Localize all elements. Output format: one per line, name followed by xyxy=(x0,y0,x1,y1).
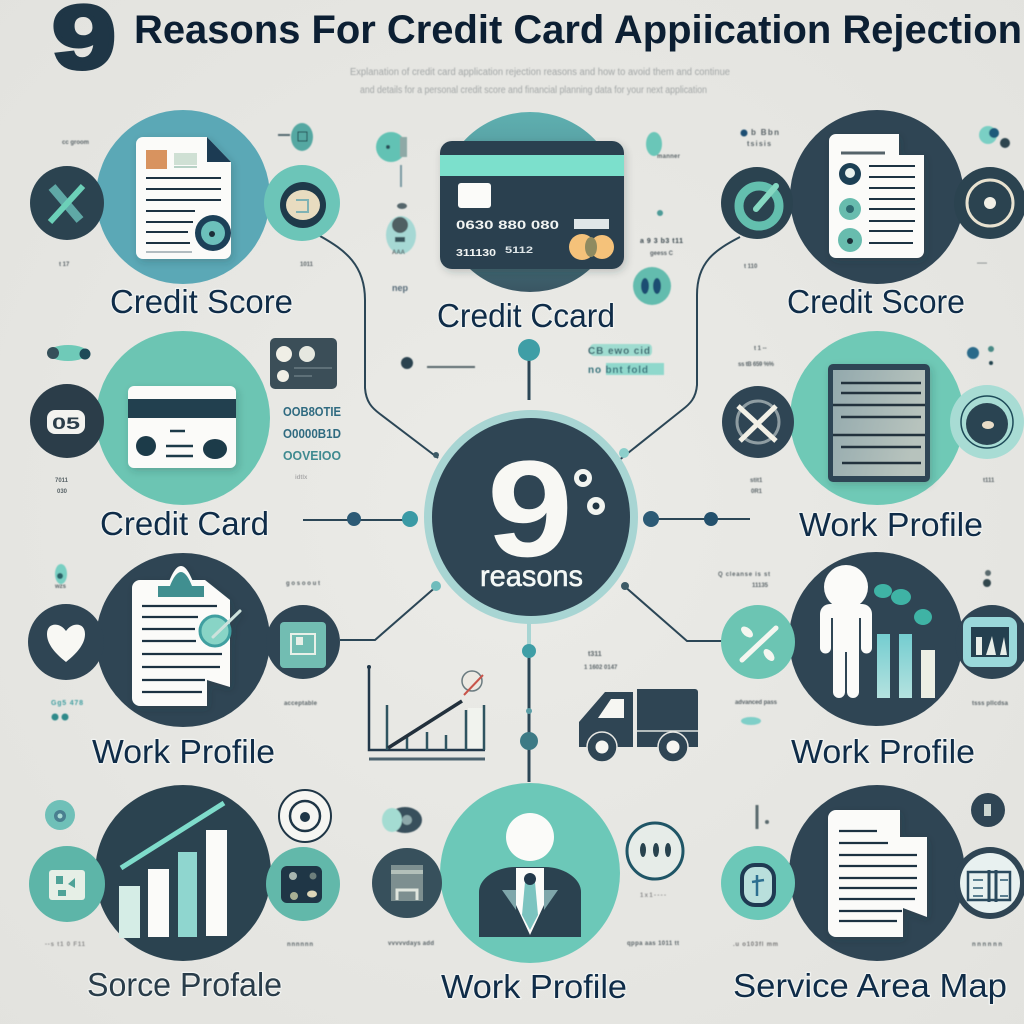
card: 311130 xyxy=(456,248,497,259)
side widgets: OOVEIOO xyxy=(283,448,341,463)
icon: percent cross xyxy=(721,605,795,679)
label: Credit Ccard xyxy=(437,297,615,334)
disc xyxy=(432,418,630,616)
small notes: b Bbn xyxy=(751,128,779,137)
small notes: ss tB 659 %% xyxy=(738,362,775,368)
icon: ring dots xyxy=(627,823,683,879)
icon: shield xyxy=(721,846,795,920)
connector lines xyxy=(303,236,750,782)
label: Credit Card xyxy=(100,505,269,542)
subtitle text block: Explanation of credit card application rejection reasons and how to avoid them and continue xyxy=(350,67,730,78)
icon: picture frame xyxy=(955,605,1024,679)
small notes: 0R1 xyxy=(751,489,763,495)
small notes: nnnnnn xyxy=(287,942,313,948)
small notes: vvvvvdays add xyxy=(388,941,434,947)
small icons xyxy=(376,132,683,376)
big circle xyxy=(440,112,620,292)
small notes: cc groom xyxy=(62,140,89,146)
label: Work Profile xyxy=(92,733,275,770)
small notes xyxy=(51,564,320,720)
card: 5112 xyxy=(505,245,533,255)
big circle xyxy=(789,552,963,726)
icon: heart xyxy=(28,604,104,680)
big circle xyxy=(790,110,964,284)
label: Sorce Profale xyxy=(87,966,282,1003)
small truck notes: t311 xyxy=(588,651,602,658)
panel: centre badge xyxy=(424,410,638,624)
icon: dark tile xyxy=(266,847,340,921)
big circle xyxy=(440,783,620,963)
small notes: t 17 xyxy=(59,262,70,268)
panel: credit card left xyxy=(30,331,341,542)
small icons: CB ewo cid xyxy=(588,346,650,357)
small notes: Gg5 478 xyxy=(51,700,83,707)
label: Credit Score xyxy=(787,283,965,320)
small notes: tsss pllcdsa xyxy=(972,701,1009,707)
small notes xyxy=(733,805,1002,948)
connector dots xyxy=(347,339,718,750)
halo xyxy=(424,410,638,624)
small notes: t111 xyxy=(983,478,995,484)
businessman figure xyxy=(479,813,581,937)
icon: small swirl xyxy=(45,800,75,830)
side widgets: OOB8OTIE xyxy=(283,404,341,419)
small notes xyxy=(59,123,314,268)
icon: target xyxy=(279,790,331,842)
small notes xyxy=(738,346,995,495)
small notes: 11135 xyxy=(752,583,769,589)
title: Reasons For Credit Card Appiication Rejection xyxy=(134,8,1022,52)
panel: credit card centre xyxy=(376,112,683,376)
icon: dial xyxy=(950,385,1024,459)
big circle xyxy=(789,785,965,961)
side widgets: 030 xyxy=(57,489,68,495)
label: Service Area Map xyxy=(733,967,1007,1004)
side widgets: 7011 xyxy=(55,478,69,484)
card xyxy=(440,141,624,269)
tablet list xyxy=(828,364,930,482)
small notes xyxy=(45,942,313,948)
card xyxy=(128,386,236,468)
small notes xyxy=(382,807,679,947)
small notes: wzs xyxy=(54,584,67,590)
small notes: acceptable xyxy=(284,701,318,707)
small notes: t 1 -- xyxy=(754,346,767,352)
clipboard document xyxy=(132,566,240,706)
small notes: advanced pass xyxy=(735,700,778,706)
big circle xyxy=(95,785,271,961)
big circle xyxy=(96,331,270,505)
small notes: gosoout xyxy=(286,581,320,587)
icon: code badge xyxy=(30,384,104,458)
subtitle text block: and details for a personal credit score and financial planning data for your next application xyxy=(360,85,707,96)
icon: delivery truck xyxy=(579,689,698,762)
panel: credit score left xyxy=(30,110,340,320)
small notes: ----- xyxy=(977,261,987,267)
panel: work profile right upper xyxy=(722,331,1024,543)
small icons: geess C xyxy=(650,251,674,257)
small icons: AAA xyxy=(392,250,406,256)
label: Work Profile xyxy=(791,733,975,770)
panel: work profile centre xyxy=(372,783,683,1005)
icon: check ring xyxy=(721,167,793,239)
side widgets xyxy=(47,338,341,495)
small truck notes xyxy=(584,651,618,671)
icon: book panels xyxy=(954,847,1024,919)
small notes: nnnnnn xyxy=(972,942,1002,948)
icon: archive xyxy=(372,848,442,918)
small notes: tsisis xyxy=(747,141,771,148)
small notes: stit1 xyxy=(750,478,763,484)
small icons: manner xyxy=(657,154,681,160)
small notes: 1x1---- xyxy=(640,893,666,899)
line chart xyxy=(367,665,485,759)
small notes: --s t1 0 F11 xyxy=(45,942,86,948)
label: Work Profile xyxy=(799,506,983,543)
big circle xyxy=(96,110,270,284)
icon: screen xyxy=(266,605,340,679)
panel: credit score right xyxy=(721,110,1024,320)
small icons: a 9 3 b3 t11 xyxy=(640,238,683,245)
small notes: 1011 xyxy=(300,262,314,268)
label: Credit Score xyxy=(110,283,293,320)
small rings xyxy=(574,469,605,515)
panel: work profile left xyxy=(28,553,340,770)
icon: small badge xyxy=(971,793,1005,827)
panel: work profile right lower xyxy=(718,552,1024,770)
icon: cross xyxy=(30,166,104,240)
caption: reasons xyxy=(480,560,583,593)
side widgets: idtlx xyxy=(295,475,308,481)
small notes: t 110 xyxy=(744,264,758,270)
small notes: Q cleanse is st xyxy=(718,572,770,578)
small notes xyxy=(740,126,1010,270)
big circle xyxy=(96,553,270,727)
small notes: qppa aas 1011 tt xyxy=(627,941,679,947)
document xyxy=(136,137,231,259)
icon: code badge: 05 xyxy=(52,414,80,433)
small notes xyxy=(718,570,1009,725)
card: 0630 880 080 xyxy=(456,218,559,232)
panel: service area map xyxy=(721,785,1024,1004)
title xyxy=(52,0,1022,88)
small truck notes: 1 1602 0147 xyxy=(584,665,618,671)
small notes: .u o103fl mm xyxy=(733,942,778,948)
icon: map tile xyxy=(29,846,105,922)
person with bars xyxy=(820,565,935,698)
bar chart xyxy=(119,803,227,938)
small icons: no bnt fold xyxy=(588,365,648,376)
document xyxy=(828,810,927,937)
document xyxy=(829,134,924,258)
label: Work Profile xyxy=(441,968,627,1005)
side widgets: O0000B1D xyxy=(283,426,341,441)
subtitle text block xyxy=(350,67,730,96)
icon: ring xyxy=(954,167,1024,239)
icon: badge xyxy=(264,165,340,241)
small icons: nep xyxy=(392,283,409,293)
panel: source profile xyxy=(29,785,340,1003)
icon: cross xyxy=(722,386,794,458)
number nine: 9 xyxy=(487,433,573,586)
big circle xyxy=(790,331,964,505)
